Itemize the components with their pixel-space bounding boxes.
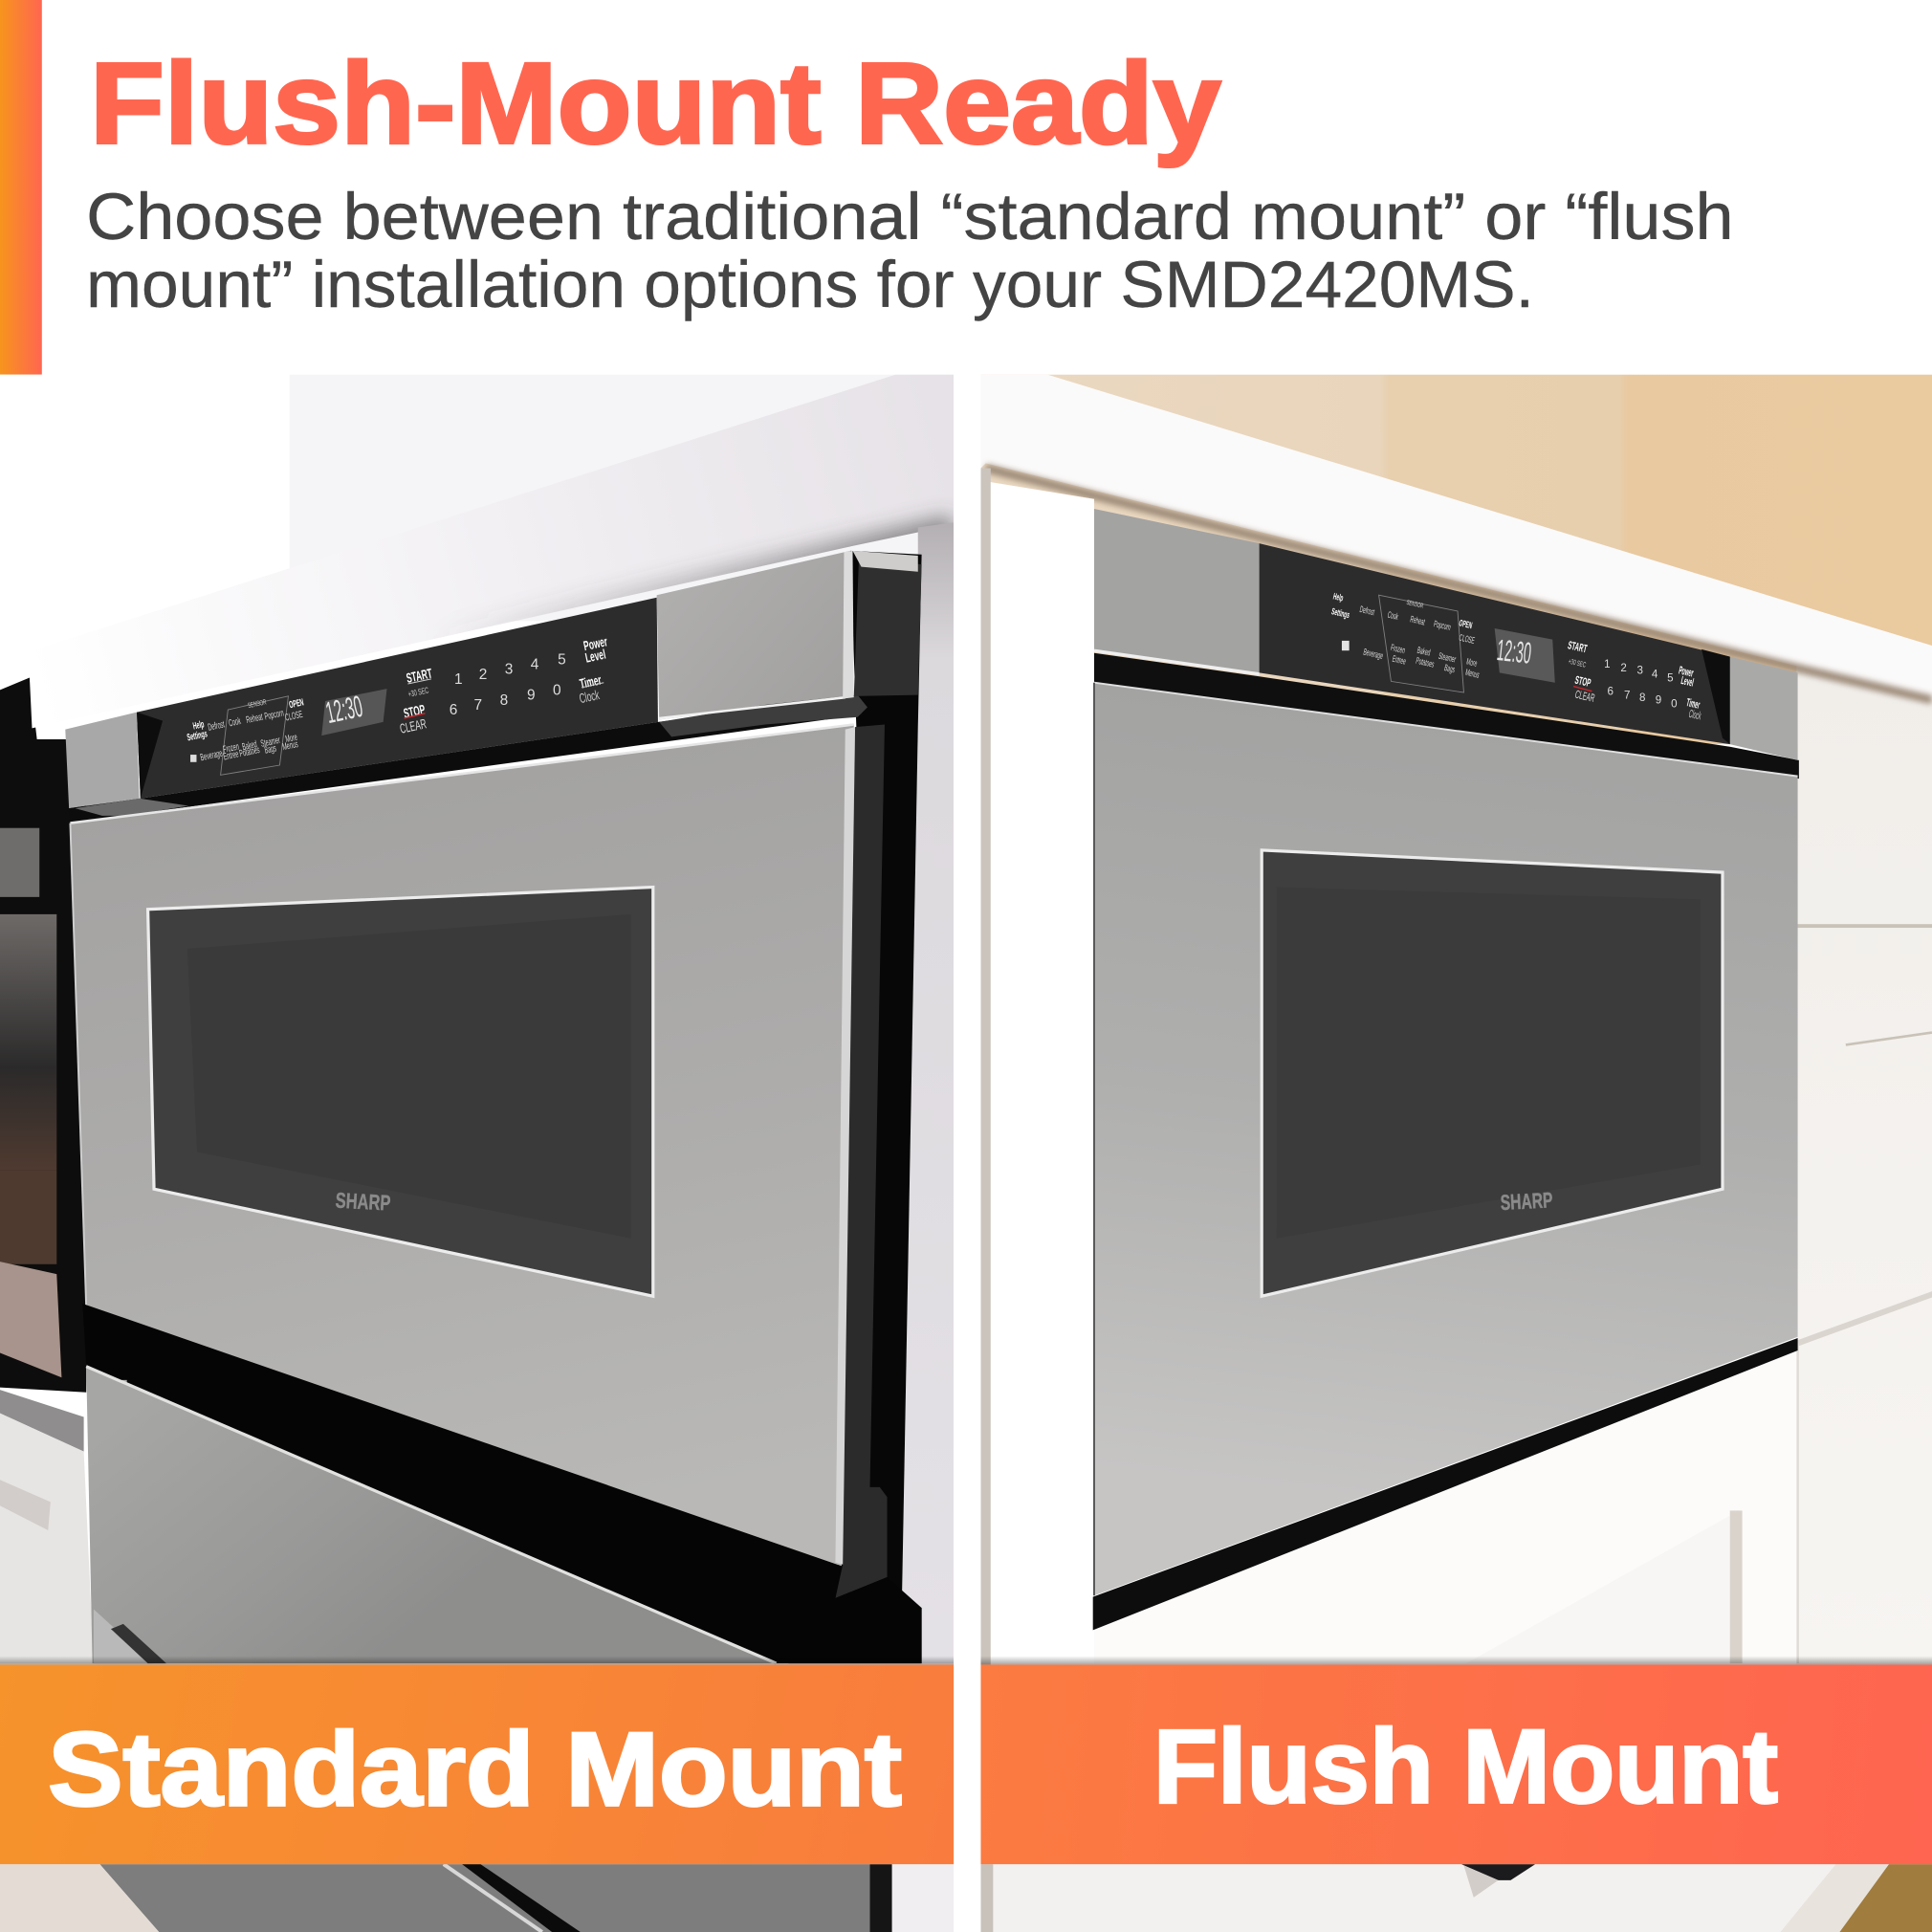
- banner: standard mount: [0, 1656, 954, 1864]
- control strip: Timer: [1685, 696, 1701, 712]
- control panel: CLOSE: [284, 709, 304, 723]
- control strip: Reheat: [1409, 613, 1427, 627]
- display: [321, 689, 387, 735]
- control panel: [1260, 543, 1730, 744]
- keypad digits: 1: [1604, 659, 1611, 670]
- control strip: Settings: [1330, 605, 1350, 621]
- control panel: Cook: [228, 715, 242, 729]
- control panel: More: [284, 732, 298, 745]
- cabinet side: [902, 522, 954, 1663]
- control strip: More: [1465, 656, 1479, 669]
- window: [148, 888, 653, 1296]
- right dark side and chrome cap: [854, 560, 922, 696]
- logo: SHARP: [1500, 1188, 1553, 1216]
- keypad digits: 8: [500, 692, 508, 709]
- control strip: Bags: [1443, 662, 1456, 675]
- control panel: Defrost: [207, 719, 226, 733]
- countertop: [29, 375, 954, 728]
- banner: flush mount: [980, 1656, 1932, 1864]
- panel: standard mount photo: [0, 375, 954, 1932]
- control panel: Frozen: [222, 741, 240, 755]
- icon: lock: [1342, 641, 1350, 650]
- cabinets right: [1796, 666, 1932, 1676]
- keypad digits: 8: [1639, 692, 1645, 704]
- header band: [0, 0, 1932, 375]
- gutter: [954, 375, 980, 1932]
- white cabinet and drawer: [991, 482, 1094, 744]
- window: [1262, 850, 1723, 1296]
- below banner: [0, 1864, 954, 1932]
- control strip: Frozen: [1390, 642, 1406, 656]
- control panel: Menus: [281, 738, 298, 753]
- door side rail: [835, 725, 888, 1598]
- control strip: 12:30: [1495, 634, 1533, 670]
- keypad digits: 6: [450, 702, 457, 718]
- keypad digits: 9: [1656, 695, 1661, 707]
- keypad digits: 0: [1671, 698, 1678, 710]
- lower drawer: [82, 1304, 922, 1663]
- control strip: Level: [1680, 674, 1695, 689]
- control panel: [69, 551, 922, 823]
- subtitle: mount” installation options for your SMD2420MS.: [86, 249, 1534, 321]
- keypad digits: 9: [527, 688, 536, 704]
- title: Flush-Mount Ready: [90, 37, 1221, 167]
- keypad digits: 5: [1667, 672, 1674, 684]
- control strip: START: [1567, 639, 1589, 656]
- control panel: Help: [192, 719, 205, 732]
- below banner: [980, 1864, 1932, 1932]
- door: [1094, 683, 1798, 1595]
- control panel: Level: [584, 647, 607, 666]
- black slot under door: [1093, 1338, 1798, 1630]
- control strip: Entree: [1392, 653, 1407, 667]
- keypad digits: 3: [1636, 666, 1643, 677]
- control strip: Menus: [1464, 667, 1481, 680]
- keypad digits: 0: [553, 683, 561, 699]
- control strip: Power: [1678, 664, 1695, 679]
- control panel: START: [405, 666, 433, 687]
- control panel: Entree: [223, 749, 240, 762]
- keypad digits: [1604, 659, 1678, 710]
- panel: flush mount photo: [980, 375, 1932, 1932]
- control strip: Baked: [1416, 645, 1432, 658]
- control strip: [1094, 509, 1799, 779]
- control panel: Bags: [264, 743, 277, 756]
- door: [70, 725, 888, 1598]
- keypad digits: 1: [454, 671, 463, 688]
- wall: [980, 375, 1932, 744]
- control panel: Beverage: [199, 748, 224, 763]
- control strip: Cook: [1387, 609, 1399, 622]
- countertop: [980, 375, 1932, 700]
- control strip: Popcorn: [1433, 618, 1452, 633]
- keypad digits: 4: [531, 657, 539, 673]
- control panel: Clock: [578, 688, 601, 707]
- control panel: Baked: [241, 738, 258, 753]
- control panel: Popcorn: [264, 708, 285, 722]
- control strip: STOP: [1573, 674, 1592, 691]
- keypad digits: 2: [1620, 663, 1627, 674]
- subtitle: Choose between traditional “standard mount” or “flush: [86, 181, 1734, 253]
- control strip: Defrost: [1359, 604, 1376, 618]
- control panel: CLEAR: [399, 716, 428, 736]
- control panel: STOP: [403, 702, 427, 721]
- control strip: Help: [1332, 591, 1345, 604]
- control strip: CLEAR: [1573, 689, 1596, 706]
- banner: flush mount: Flush Mount: [1153, 1709, 1778, 1826]
- keypad digits: 3: [505, 662, 513, 678]
- control strip: SENSOR: [1406, 600, 1424, 610]
- banner: standard mount: Standard Mount: [48, 1711, 902, 1828]
- control strip: Beverage: [1362, 647, 1384, 661]
- control strip: Clock: [1688, 708, 1702, 722]
- keypad digits: 2: [479, 667, 487, 683]
- control panel: 12:30: [323, 690, 365, 731]
- keypad digits: 4: [1652, 670, 1658, 681]
- control strip: OPEN: [1458, 618, 1473, 631]
- stainless control strip left: [65, 713, 140, 808]
- control strip: CLOSE: [1458, 632, 1476, 646]
- keypad digits: 5: [558, 651, 566, 668]
- icon: lock: [190, 755, 196, 762]
- keypad digits: 7: [1624, 690, 1631, 701]
- control panel: Power: [582, 634, 609, 654]
- display: [1495, 628, 1555, 683]
- control panel: Reheat: [245, 712, 264, 726]
- logo: SHARP: [335, 1189, 391, 1216]
- control panel: Timer: [579, 672, 604, 692]
- control panel: OPEN: [288, 697, 305, 711]
- control panel: +30 SEC: [407, 685, 430, 699]
- accent bar: [0, 0, 42, 375]
- control panel: Potatoes: [238, 744, 260, 759]
- control panel: SENSOR: [247, 698, 268, 711]
- control strip: Steamer: [1438, 650, 1458, 665]
- keypad digits: [450, 651, 566, 718]
- control strip: +30 SEC: [1568, 658, 1587, 670]
- control strip: Potatoes: [1415, 655, 1436, 670]
- black right frame: [756, 551, 922, 1664]
- control panel: Steamer: [260, 735, 281, 749]
- keypad digits: 7: [474, 697, 482, 714]
- keypad digits: 6: [1608, 687, 1614, 698]
- control panel: Settings: [187, 728, 209, 743]
- neighbouring oven: [0, 678, 94, 1663]
